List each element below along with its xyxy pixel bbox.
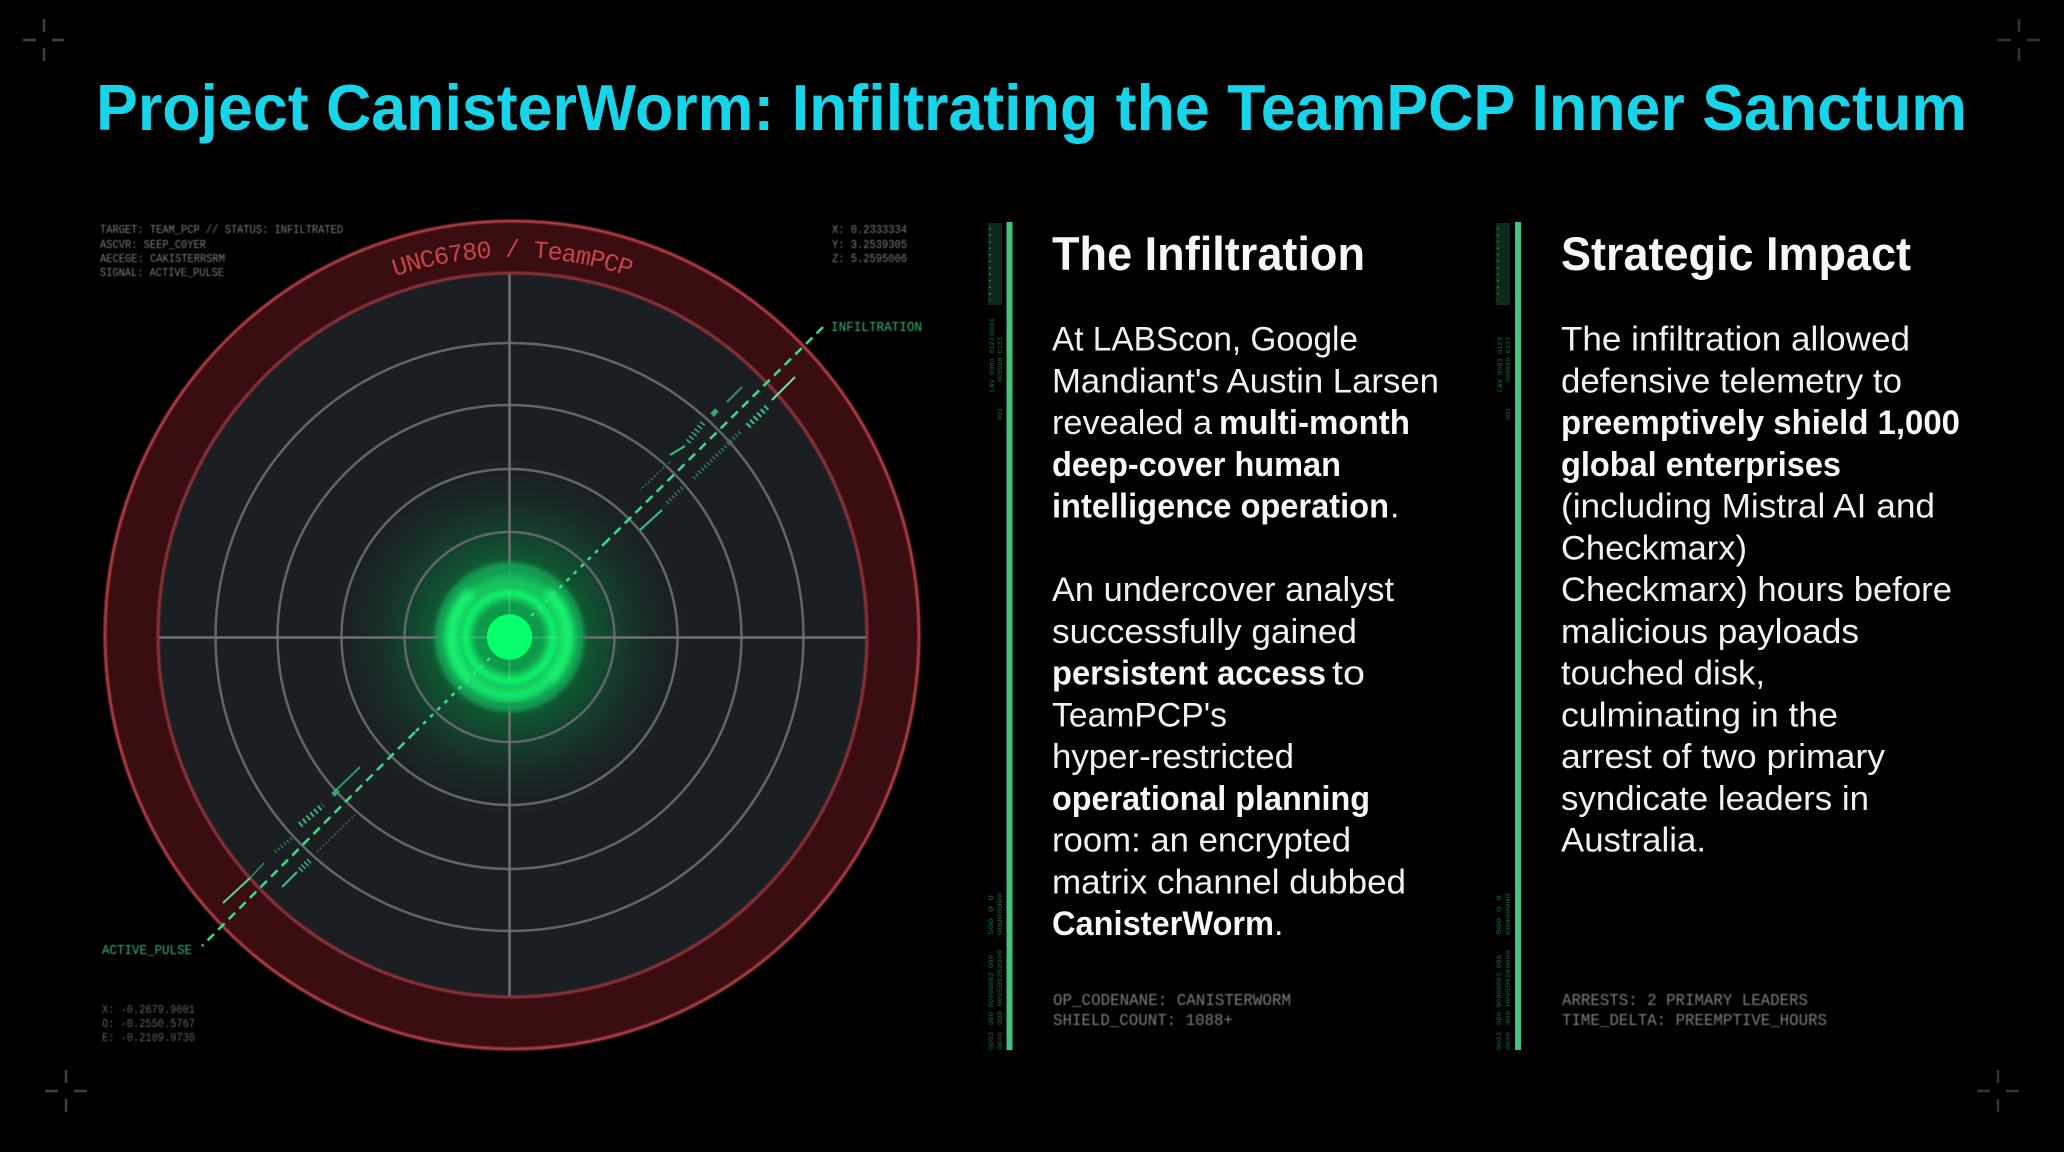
body text: .	[1390, 488, 1399, 526]
data strip: CAV 0083 0123	[1497, 337, 1504, 392]
body text: Mandiant's Austin Larsen	[1052, 362, 1439, 400]
body text: matrix channel dubbed	[1052, 863, 1406, 901]
body text: .	[1274, 905, 1283, 943]
text block: bottom left coordinates: O: -0.2550.5767	[102, 1018, 195, 1031]
column divider bar	[1515, 222, 1521, 1050]
panel: radar diagram	[102, 218, 922, 1052]
body text: An undercover analyst	[1052, 571, 1395, 609]
data strip: 000 000500280000	[997, 950, 1004, 1025]
icon: corner crosshair bottom right	[1977, 1070, 2019, 1112]
text block: bottom left coordinates: E: -0.2109.9730	[102, 1032, 195, 1045]
core halo	[324, 452, 694, 822]
heading: The Infiltration	[1052, 227, 1365, 280]
label: active pulse: ACTIVE_PULSE	[102, 943, 192, 959]
ring label: UNC6780 / TeamPCP	[392, 239, 632, 275]
data strip: 0001	[989, 318, 996, 336]
data strip: 001	[1505, 408, 1512, 420]
body text: arrest of two primary	[1561, 738, 1885, 776]
data strip	[988, 223, 1004, 1050]
data strip: 500 0 0	[1496, 895, 1503, 935]
text block: top left status readout: TARGET: TEAM_PCP // STATUS: INFILTRATED	[100, 224, 343, 237]
ring outlines	[105, 221, 919, 1049]
body text: malicious payloads	[1561, 613, 1859, 651]
body text: touched disk,	[1561, 654, 1765, 692]
text block: top right coordinates: Z: 5.2595006	[832, 253, 907, 266]
data strip: 001	[997, 408, 1004, 420]
body text: TeamPCP's	[1052, 696, 1227, 734]
data strip	[1496, 223, 1512, 1050]
body text: deep-cover human	[1052, 446, 1341, 484]
body text: (including Mistral AI and	[1561, 488, 1935, 526]
heading: Strategic Impact	[1561, 227, 1911, 280]
body text	[1561, 320, 1960, 860]
data strip: 00000000	[1505, 893, 1512, 935]
vector annotations lower left	[223, 767, 360, 903]
text block: top left status readout	[100, 224, 343, 280]
body text: multi-month	[1219, 404, 1410, 442]
label: infiltration: INFILTRATION	[831, 320, 922, 336]
footer code text: OP_CODENANE: CANISTERWORM	[1053, 992, 1291, 1011]
data strip: 500 0 0	[988, 895, 995, 935]
data strip: CAV 0083 0123	[989, 337, 996, 392]
footer code text: SHIELD_COUNT: 1088+	[1053, 1012, 1233, 1031]
data strip: 000 000500280000	[1505, 950, 1512, 1025]
radar disc	[158, 273, 867, 997]
data strip: 0040	[1505, 1032, 1512, 1050]
body text: syndicate leaders in	[1561, 780, 1869, 818]
body text: revealed a	[1052, 404, 1212, 442]
body text: preemptively shield 1,000	[1561, 404, 1960, 442]
text block: top right coordinates: X: 0.2333334	[832, 224, 907, 237]
body text: to	[1332, 654, 1365, 692]
body text: culminating in the	[1561, 696, 1838, 734]
data strip: 000 00000083 000	[1496, 955, 1503, 1025]
footer code text: ARRESTS: 2 PRIMARY LEADERS	[1562, 992, 1808, 1011]
data strip: 009008 0133	[1505, 337, 1512, 382]
outer threat ring	[105, 221, 919, 1049]
text block: top left status readout: AECEGE: CAKISTERRSRM	[100, 253, 225, 266]
radar range rings	[216, 343, 804, 931]
text block: top left status readout: SIGNAL: ACTIVE_PULSE	[100, 267, 224, 280]
data strip: 000 00000083 000	[988, 955, 995, 1025]
body text: At LABScon, Google	[1052, 320, 1358, 358]
body text: defensive telemetry to	[1561, 362, 1902, 400]
body text: Checkmarx)	[1561, 529, 1747, 567]
body text: operational planning	[1052, 780, 1370, 818]
data strip: 009008 0133	[997, 337, 1004, 382]
main infiltration dashed vector	[202, 327, 823, 946]
text block: top right coordinates: Y: 3.2539305	[832, 239, 907, 252]
icon: corner crosshair top right	[1998, 19, 2040, 61]
icon: corner crosshair bottom left	[45, 1070, 87, 1112]
text block: top right coordinates	[832, 224, 907, 266]
body text: persistent access	[1052, 654, 1326, 692]
text block: top left status readout: ASCVR: SEEP_C0YER	[100, 239, 206, 252]
body text: room: an encrypted	[1052, 822, 1351, 860]
text block: bottom left coordinates: X: -0.2679.9001	[102, 1004, 195, 1017]
data strip: 0040	[997, 1032, 1004, 1050]
body text: The infiltration allowed	[1561, 320, 1910, 358]
title: Project CanisterWorm: Infiltrating the TeamPCP Inner Sanctum	[96, 71, 1967, 144]
text block: bottom left coordinates	[102, 1004, 195, 1045]
footer code text: TIME_DELTA: PREEMPTIVE_HOURS	[1562, 1012, 1827, 1031]
vector annotations upper right	[640, 377, 795, 530]
body text: Australia.	[1561, 822, 1706, 860]
glowing core	[434, 562, 584, 712]
body text: successfully gained	[1052, 613, 1357, 651]
panel: strategic impact	[1496, 222, 1960, 1050]
body text: global enterprises	[1561, 446, 1841, 484]
body text: hyper-restricted	[1052, 738, 1294, 776]
radar crosshair	[159, 274, 866, 996]
body text	[1052, 320, 1439, 943]
body text: intelligence operation	[1052, 488, 1389, 526]
data strip: 0003	[1496, 1032, 1503, 1050]
column divider bar	[1006, 222, 1012, 1050]
footer code text	[1053, 992, 1291, 1031]
data strip: 00000000	[997, 893, 1004, 935]
body text: CanisterWorm	[1052, 905, 1274, 943]
panel: the infiltration	[988, 222, 1439, 1050]
body text: Checkmarx) hours before	[1561, 571, 1952, 609]
data strip: 0003	[988, 1032, 995, 1050]
footer code text	[1562, 992, 1827, 1031]
icon: corner crosshair top left	[23, 19, 64, 61]
